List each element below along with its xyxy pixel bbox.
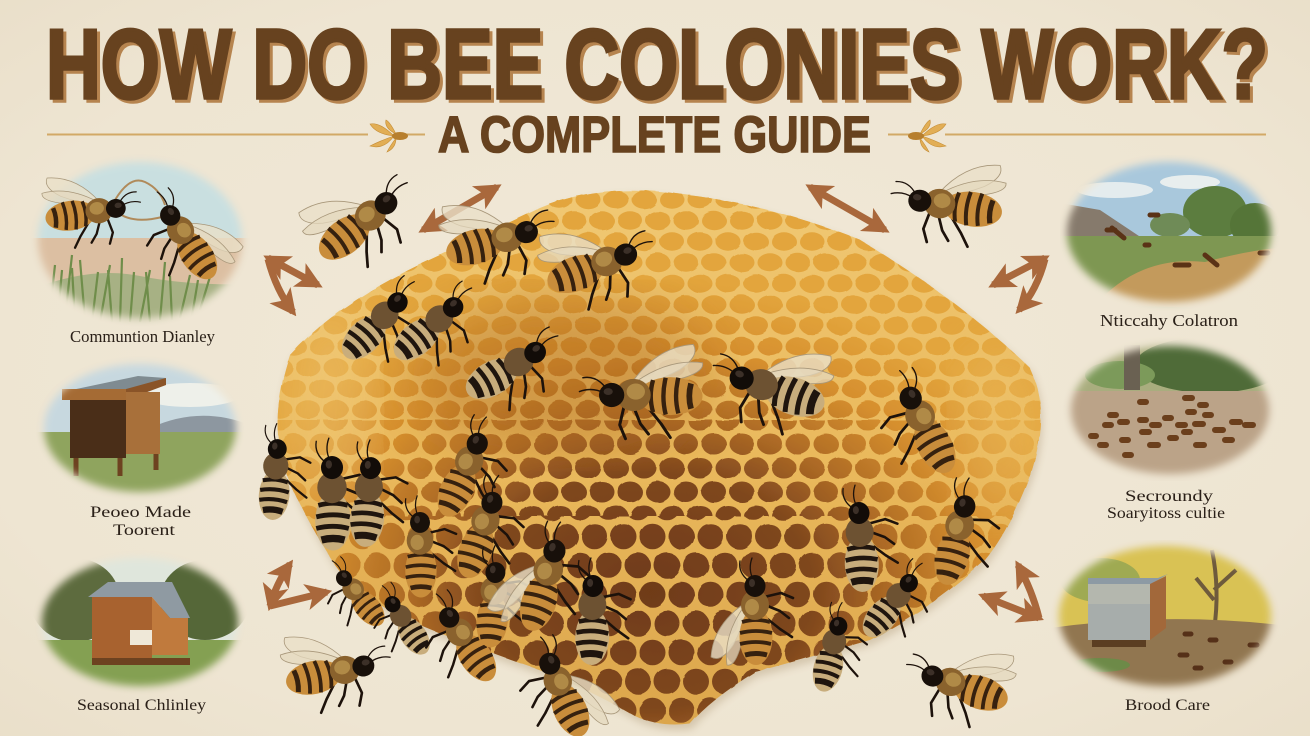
bee: top — [434, 180, 565, 292]
bee: upper left b — [386, 279, 497, 383]
label: swarm: Secroundy — [1125, 488, 1213, 505]
arrows: right lower — [983, 565, 1039, 618]
bees on and around the comb — [257, 149, 1021, 736]
bee: crowd 6 — [405, 496, 456, 598]
panel: bee hotel scene — [38, 361, 242, 498]
label: seasonal: Seasonal Chlinley — [77, 697, 206, 714]
tiny bees — [1180, 634, 1257, 668]
subtitle rule right with bee ornament — [888, 120, 1266, 152]
bee: crowd 2 — [315, 438, 372, 550]
label: bee hotel: Peoeo Made — [90, 504, 191, 521]
icon: wooden bee house — [62, 376, 166, 476]
label: bee hotel: Toorent — [113, 522, 176, 539]
bee: crowd 13 — [711, 558, 793, 665]
arrows: left upper — [268, 258, 318, 312]
bee: upper left a — [334, 273, 442, 381]
bee: communication left — [40, 166, 146, 252]
bee: upper centre — [459, 325, 578, 425]
bee: top left — [292, 149, 434, 286]
bee: right — [862, 365, 964, 490]
bee: crowd 1 — [257, 423, 314, 523]
bee: crowd 7 — [309, 555, 391, 642]
bee: centre — [579, 344, 703, 439]
bee: crowd 3 — [348, 439, 411, 550]
bee: centre right — [699, 323, 839, 445]
bee: bottom right — [894, 626, 1021, 736]
panel: swarm on ground — [1066, 340, 1274, 478]
bee: bottom left — [277, 617, 399, 720]
panel: foraging landscape — [1060, 155, 1280, 311]
subtitle: A COMPLETE GUIDE — [438, 106, 871, 163]
bee: crowd 5 — [450, 471, 537, 590]
honeycomb — [276, 190, 1046, 733]
bee: crowd 17 — [929, 475, 1009, 594]
arrows: left lower — [270, 564, 327, 606]
bee: crowd 4 — [430, 412, 524, 531]
bee: crowd 11 — [485, 509, 601, 642]
bee: crowd 14 — [503, 620, 623, 736]
bee: crowd 9 — [404, 587, 504, 700]
bee: communication right — [125, 170, 248, 298]
panel: seasonal hive scene — [36, 558, 244, 692]
bee: top centre — [532, 201, 667, 321]
bee: crowd 12 — [574, 557, 632, 666]
arrow: top left — [423, 187, 497, 230]
label: swarm: Soaryitoss cultie — [1107, 505, 1225, 522]
panel: communication display — [34, 159, 246, 323]
bee: crowd 18 — [855, 556, 949, 655]
icon: stacked hive box — [1088, 574, 1168, 647]
icon: wooden hive with grey roof — [88, 582, 190, 665]
vignette scene — [34, 159, 246, 323]
bee: crowd 10 — [474, 545, 534, 650]
bee: crowd 16 — [842, 484, 900, 593]
bee: top right — [885, 151, 1009, 252]
subtitle rule left with bee ornament — [47, 120, 425, 152]
tiny foraging bees — [1107, 215, 1268, 265]
swarm of small bees — [1091, 398, 1253, 455]
arrow: top right — [810, 187, 885, 230]
bee: crowd 15 — [808, 600, 876, 699]
bee: crowd 8 — [357, 580, 436, 669]
arrows: right upper — [993, 258, 1045, 310]
label: communication display: Communtion Dianley — [70, 327, 216, 346]
panel: brood care hive — [1050, 540, 1280, 695]
label: foraging: Nticcahy Colatron — [1100, 311, 1238, 330]
label: brood care: Brood Care — [1125, 697, 1210, 714]
